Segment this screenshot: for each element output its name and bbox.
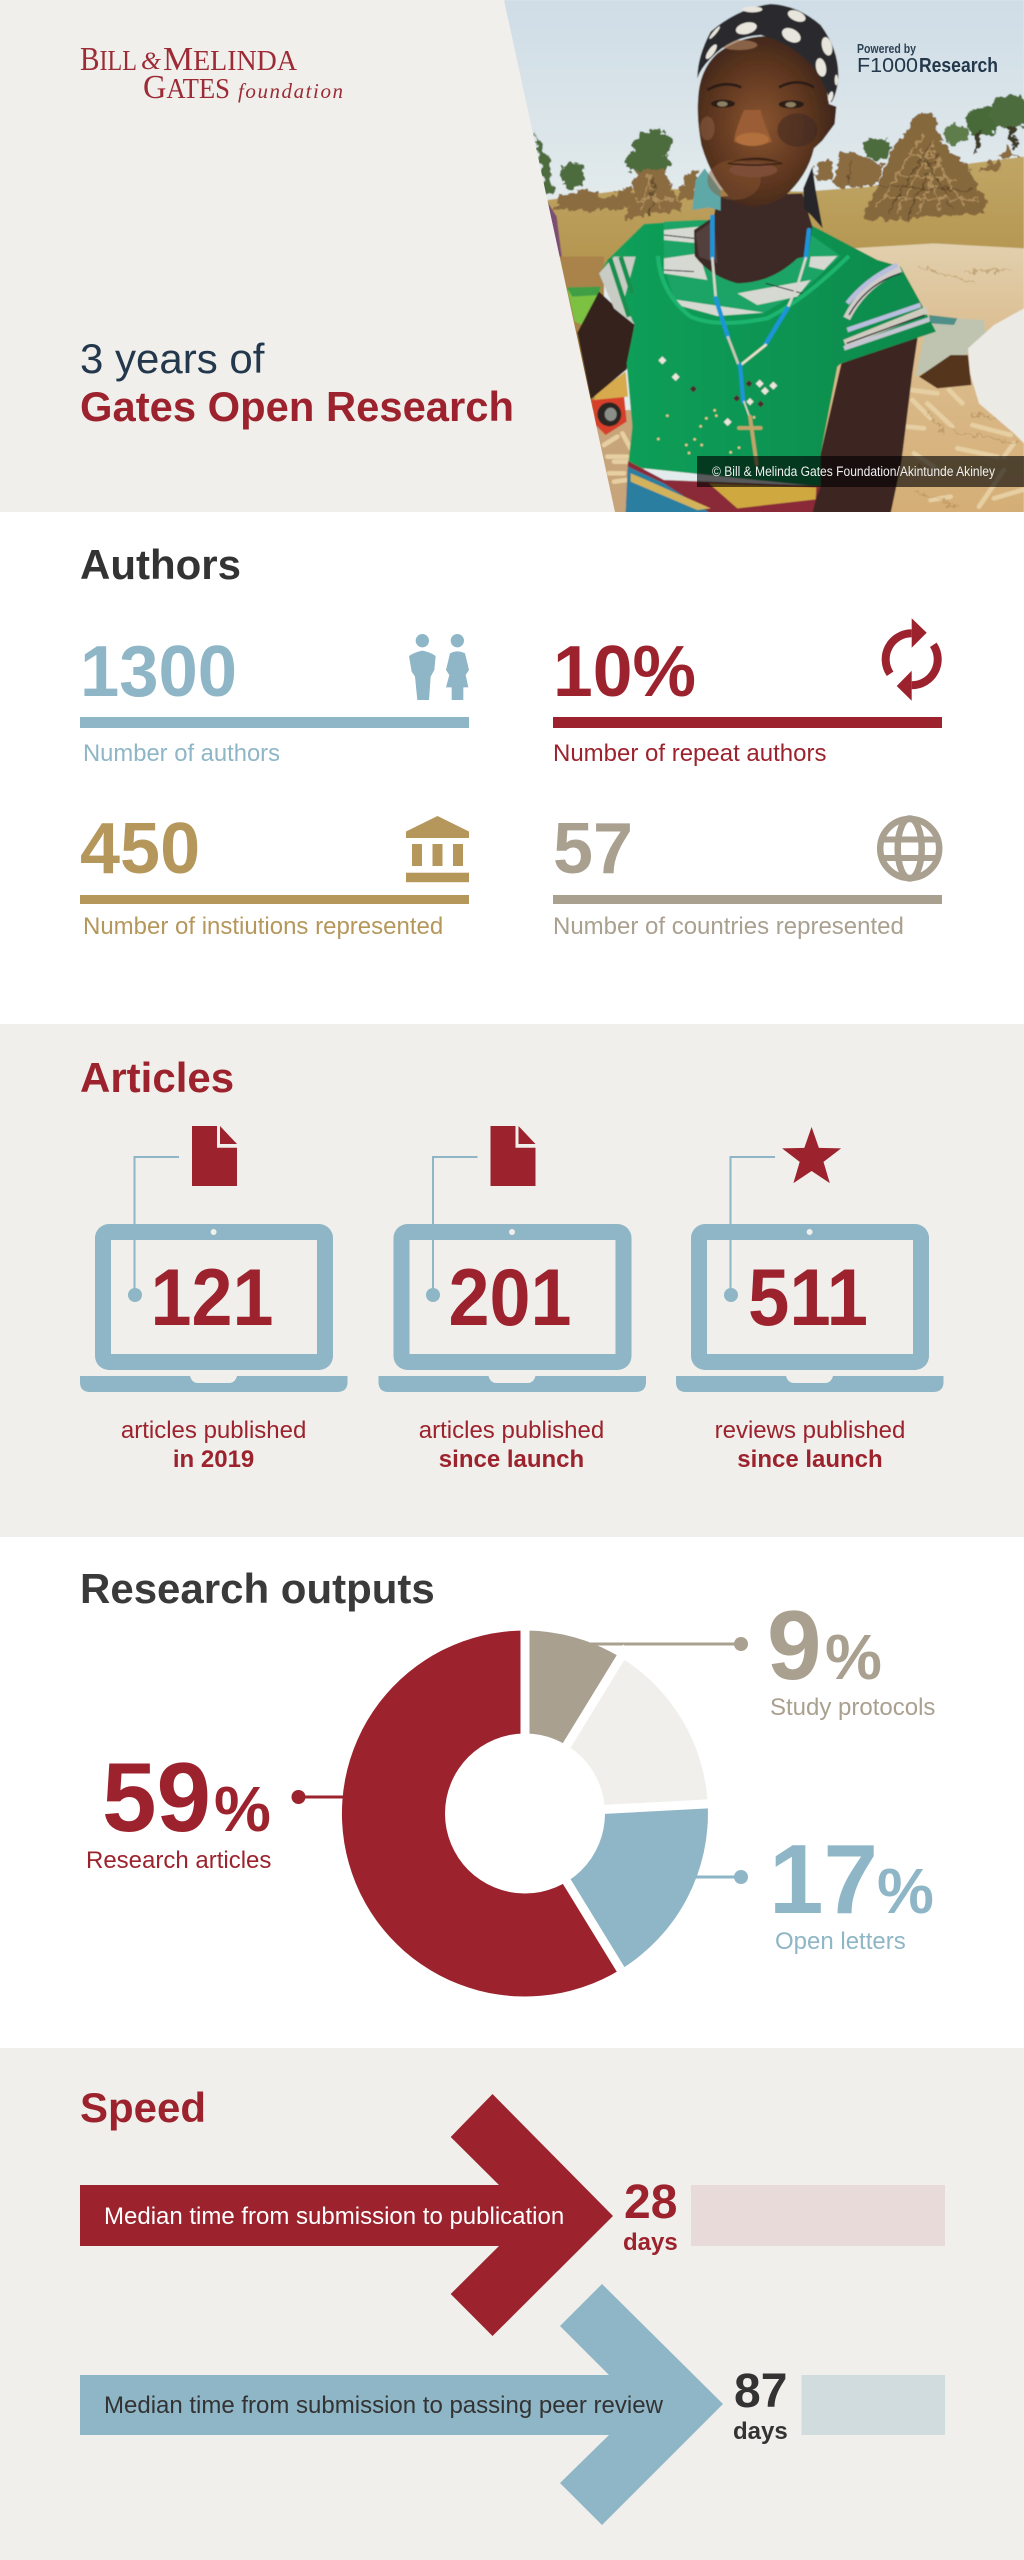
caption: articles since launch: since launch [439,1446,584,1473]
label: research articles 59%: 59 [102,1742,211,1852]
F1000Research logo: Research [919,55,998,77]
caption: reviews since launch: since launch [737,1446,883,1473]
stat: institutions: 450 [80,809,200,889]
neck and chest [694,193,812,283]
logo: Bill & Melinda Gates Foundation: BILL [80,41,137,78]
value: 87 days: days [733,2418,788,2445]
straw stacks [554,113,1017,221]
stat: number of authors: Number of authors [83,740,280,767]
photo: young woman in a green shirt in a maize field [504,0,1024,513]
stat: institutions [80,809,469,940]
arrow: peer review time: Median time from submission to passing peer review [104,2392,664,2419]
caption: reviews since launch: reviews published [715,1417,905,1444]
caption: articles since launch [419,1417,604,1473]
right arm [812,335,918,513]
undershirt in neckline [664,220,841,316]
field [547,157,1024,267]
label: open letters 17%: % [877,1855,934,1927]
value: 28 days [623,2176,678,2256]
panel: authors [80,541,942,940]
header panel [0,0,1024,513]
heading: articles: Articles [80,1054,234,1101]
label: research articles 59%: Research articles [86,1847,271,1874]
icon: document [490,1126,536,1186]
panel: articles [0,1024,1024,1537]
purple cloth at left [548,202,562,258]
left arm [577,292,635,399]
caption: articles in 2019: articles published [121,1417,306,1444]
scarf tail [803,167,823,228]
distant trees [534,94,1024,197]
sequins [658,356,777,426]
label: open letters 17% [769,1824,934,1955]
F1000Research logo: Powered by [857,41,917,56]
logo: Bill & Melinda Gates Foundation [80,41,343,106]
F1000Research logo: F1000 [857,55,918,77]
heading: authors: Authors [80,541,241,588]
bar: remainder 87 days [802,2375,945,2435]
necklace [712,217,809,464]
value: 87 days: 87 [734,2365,787,2418]
waist wrap [626,461,821,513]
person at the right [916,317,986,377]
stat: countries: Number of countries represented [553,913,904,940]
laptop: articles in 2019 [80,1126,348,1392]
stat: countries: 57 [553,809,633,889]
left sleeve stripes [599,257,636,324]
photo credit: © Bill & Melinda Gates Foundation/Akintunde Akinley [712,464,995,479]
foreground ground and maize [804,243,1024,513]
arrow: publication time [80,2094,613,2336]
stat: countries [553,809,942,940]
green basin and red tub [567,289,598,325]
shirt [599,220,936,487]
value: 87 days [733,2365,788,2445]
connector lines [292,1637,748,1884]
laptop: articles in 2019: 121 [150,1253,274,1343]
label: study protocols 9%: 9 [767,1590,822,1700]
arrow: peer review time [80,2284,723,2525]
bar: remainder 28 days [691,2185,945,2246]
panel: research outputs [80,1565,935,1996]
logo: Bill & Melinda Gates Foundation: MELINDA [163,41,298,78]
title [80,335,514,430]
icon: star [782,1127,841,1183]
heading: research outputs: Research outputs [80,1565,435,1612]
right sleeve stripes [844,265,929,348]
label: study protocols 9%: % [825,1621,882,1693]
icon: document [192,1126,237,1186]
value: 28 days: days [623,2229,678,2256]
value: 28 days: 28 [624,2176,677,2229]
panel: speed [0,2048,1024,2560]
stat: number of authors [80,632,469,767]
caption: articles since launch: articles published [419,1417,604,1444]
stat: repeat authors: Number of repeat authors [553,740,826,767]
laptop: reviews since launch: 511 [748,1253,868,1343]
photo credit [697,456,1024,487]
laptop: articles since launch [378,1126,646,1392]
stat: repeat authors: 10% [553,632,696,712]
laptop: articles since launch: 201 [448,1253,572,1343]
teal cloth behind head [692,168,721,211]
shirt collar stitching [658,256,849,323]
F1000Research logo [857,41,998,77]
label: study protocols 9%: Study protocols [770,1694,935,1721]
laptop: reviews since launch [676,1127,944,1392]
face [698,36,836,206]
label: open letters 17%: 17 [769,1824,878,1934]
label: open letters 17%: Open letters [775,1928,906,1955]
label: research articles 59% [86,1742,271,1874]
label: study protocols 9% [767,1590,935,1721]
donut chart [342,1618,720,1996]
stat: number of authors: 1300 [80,632,237,712]
logo: Bill & Melinda Gates Foundation: foundation [238,79,343,103]
icon: institution building [406,816,469,882]
arrow: publication time: Median time from submission to publication [104,2203,564,2230]
logo: Bill & Melinda Gates Foundation: GATES [143,69,230,106]
heading: speed: Speed [80,2084,206,2131]
title: 3 years of [80,335,265,382]
logo: Bill & Melinda Gates Foundation: & [141,48,162,75]
stat: repeat authors [553,632,942,767]
icon: globe [880,818,939,878]
icon: people [409,634,469,700]
title: Gates Open Research [80,383,514,430]
caption: articles in 2019: in 2019 [173,1446,254,1473]
caption: articles in 2019 [121,1417,306,1473]
icon: refresh arrows [886,618,938,701]
caption: reviews since launch [715,1417,905,1473]
label: research articles 59%: % [214,1773,271,1845]
headscarf [697,4,838,103]
stat: institutions: Number of instiutions represented [83,913,443,940]
